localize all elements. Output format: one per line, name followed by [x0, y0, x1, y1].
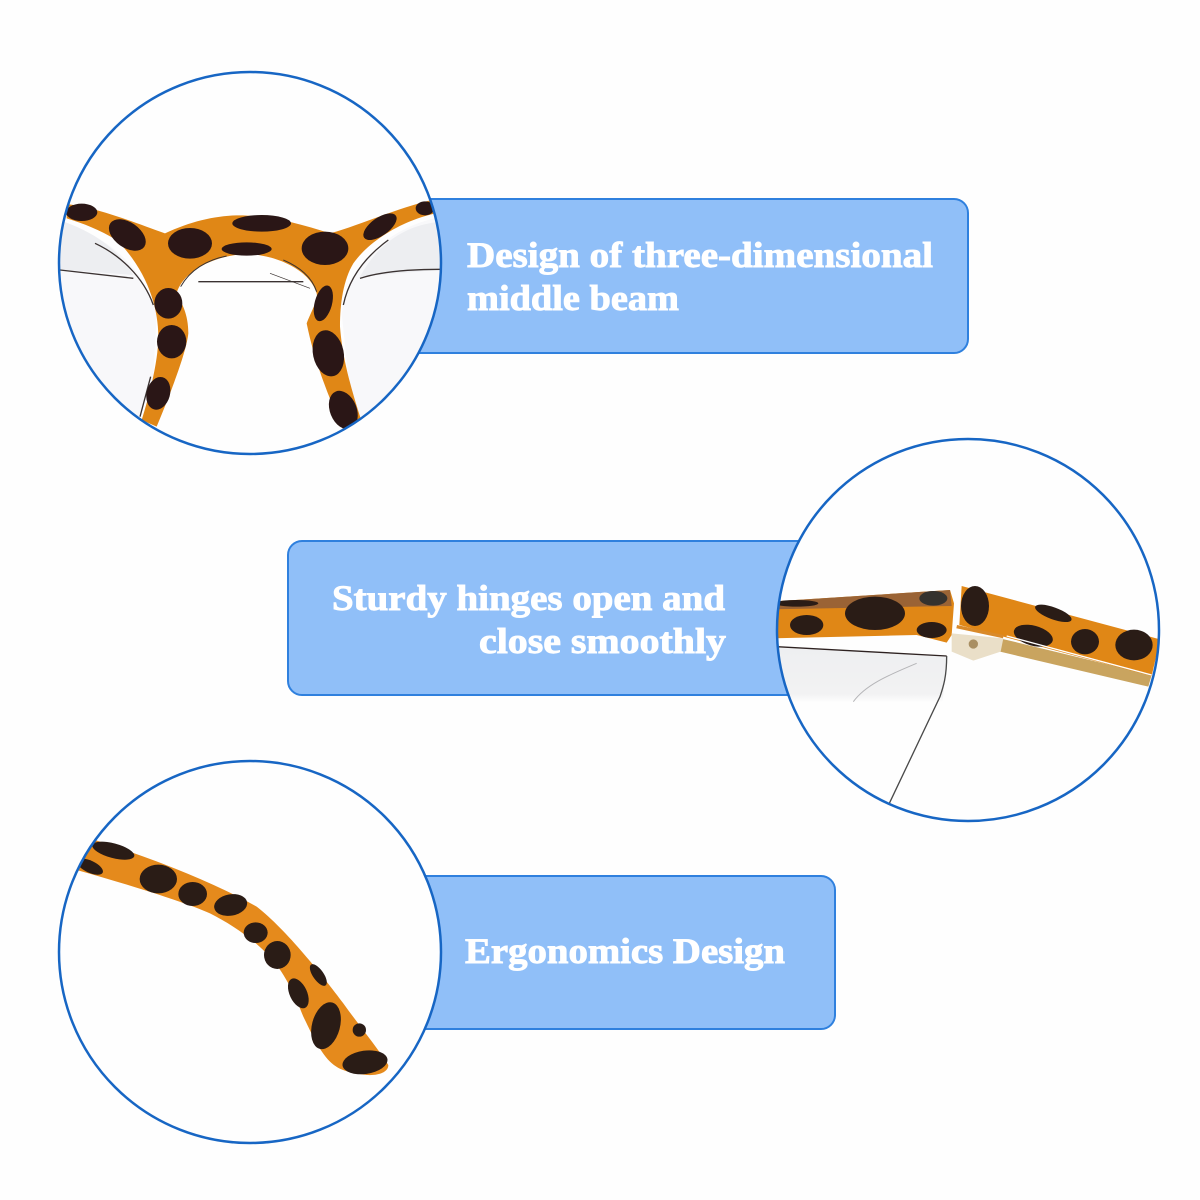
text: middle beam caption: middle beam: [467, 278, 679, 318]
circle: ergonomic temple detail: [59, 761, 441, 1143]
right lens: [342, 217, 443, 420]
text: middle beam caption: Design of three-dimensional: [467, 235, 933, 275]
text: middle beam caption: [467, 235, 933, 318]
lens edge lines: [60, 240, 442, 417]
icon: temple arm: [959, 586, 1160, 687]
icon: temple tip: [75, 838, 389, 1077]
panel: hinges label: [288, 541, 818, 695]
panel: ergonomics label: [400, 876, 835, 1029]
icon: front frame: [770, 590, 954, 643]
text: hinges caption: close smoothly: [479, 621, 726, 661]
icon: hinge metal: [952, 627, 1003, 661]
lens top tint, right: [360, 222, 443, 277]
lens: [779, 648, 946, 696]
lens lines: [777, 647, 947, 803]
text: ergonomics caption: Ergonomics Design: [465, 931, 785, 971]
text: hinges caption: [332, 578, 726, 661]
nose pad lines: [181, 256, 317, 292]
lens top tint, left: [60, 222, 133, 275]
circle: middle beam detail: [50, 72, 443, 454]
text: hinges caption: Sturdy hinges open and: [332, 578, 725, 618]
circle: hinge detail: [770, 439, 1160, 821]
panel: middle beam label: [400, 199, 968, 353]
left lens: [50, 219, 157, 420]
icon: tortoiseshell bridge: [66, 200, 436, 434]
